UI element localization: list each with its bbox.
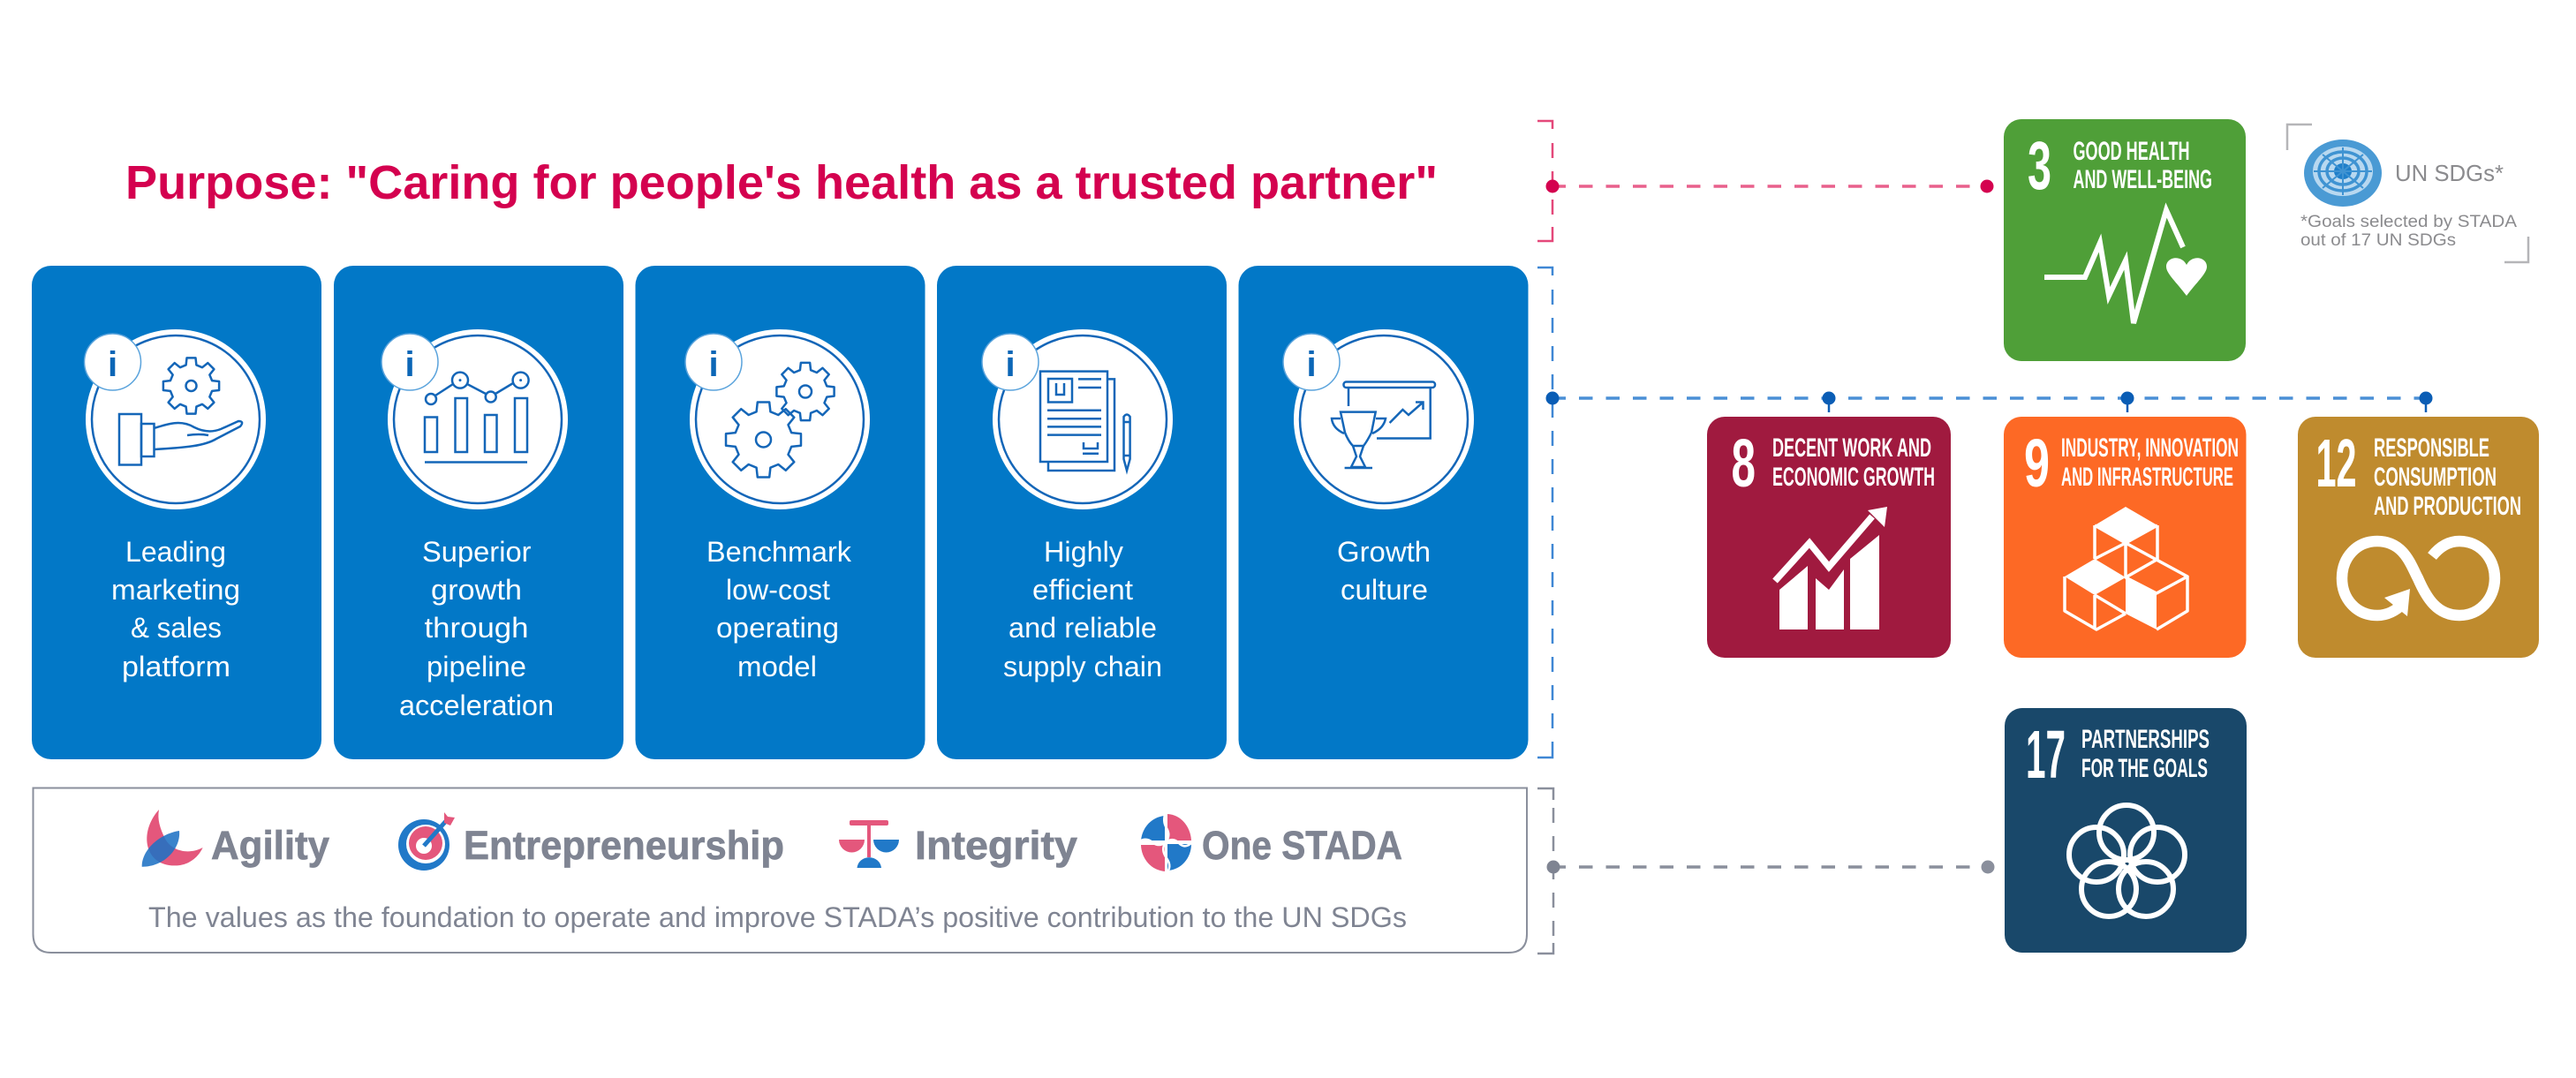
card text: operating <box>716 612 839 644</box>
icon: heartbeat and heart <box>2044 210 2207 323</box>
SDG tile 9: 9 <box>2024 426 2050 501</box>
SDG tile 8: 8 <box>1731 426 1756 501</box>
card text: through <box>424 612 528 644</box>
icon: documents and pen: i <box>1005 345 1016 384</box>
UN SDGs note: UN SDGs* <box>2395 160 2504 186</box>
SDG tile 17 <box>2005 708 2247 953</box>
panel: benchmark low-cost operating model <box>636 266 925 759</box>
SDG tile 3: 3 <box>2028 128 2051 204</box>
panel: leading marketing and sales platform <box>32 266 321 759</box>
card text <box>706 536 852 682</box>
value: agility: Agility <box>211 823 329 868</box>
card text: efficient <box>1032 574 1133 606</box>
SDG tile 12: RESPONSIBLE <box>2374 433 2489 463</box>
icon: rising bars and arrow <box>1775 507 1887 629</box>
value: integrity: Integrity <box>915 823 1077 868</box>
SDG tile 3: AND WELL-BEING <box>2074 165 2212 194</box>
SDG tile 17: FOR THE GOALS <box>2081 754 2208 783</box>
panel: values <box>34 788 1527 953</box>
connector: values to SDG 17 <box>1537 788 1994 954</box>
card text: Highly <box>1044 536 1123 568</box>
card text: & sales <box>131 612 222 644</box>
UN SDGs note: out of 17 UN SDGs <box>2300 231 2456 250</box>
SDG tile 12: 12 <box>2315 426 2356 501</box>
values caption: The values as the foundation to operate and improve STADA’s positive contribution to the UN SDGs <box>148 901 1407 933</box>
icon: interlinked rings <box>2069 805 2185 916</box>
panel: superior growth through pipeline acceleration <box>334 266 623 759</box>
card text: low-cost <box>726 574 830 606</box>
icon: stacked cubes <box>2065 507 2187 629</box>
icon: bar chart with trend <box>381 329 568 509</box>
card text: and reliable <box>1008 612 1157 644</box>
UN SDGs note: *Goals selected by STADA <box>2300 213 2517 231</box>
card text: acceleration <box>399 690 554 721</box>
card text: Growth <box>1337 536 1431 568</box>
SDG tile 9: INDUSTRY, INNOVATION <box>2061 433 2239 463</box>
SDG tile 17: 17 <box>2026 717 2066 793</box>
card text: model <box>737 651 817 682</box>
UN SDGs note <box>2287 124 2528 262</box>
icon: two gears <box>685 329 870 509</box>
icon: entrepreneurship target <box>398 812 455 871</box>
icon: one stada puzzle <box>1139 812 1192 874</box>
panel: highly efficient and reliable supply chain <box>937 266 1227 759</box>
title: Purpose: "Caring for people's health as a trusted partner" <box>125 156 1438 209</box>
icon: infinity loop arrow <box>2342 541 2495 616</box>
SDG tile 3: GOOD HEALTH <box>2074 137 2190 166</box>
SDG tile 12: CONSUMPTION <box>2374 463 2497 492</box>
icon: trophy and presentation board <box>1283 329 1474 509</box>
icon: documents and pen <box>982 329 1173 509</box>
value: entrepreneurship: Entrepreneurship <box>464 823 784 868</box>
card text: supply chain <box>1003 651 1162 682</box>
SDG tile 8 <box>1707 417 1951 658</box>
card text: Leading <box>125 536 226 568</box>
icon: agility <box>142 810 203 867</box>
card text <box>1003 536 1162 682</box>
icon: hand with gear: i <box>108 345 117 384</box>
card text: culture <box>1341 574 1428 606</box>
icon: hand with gear <box>85 329 266 509</box>
card text <box>1337 536 1431 606</box>
SDG tile 8: DECENT WORK AND <box>1772 433 1931 463</box>
icon: two gears: i <box>708 345 719 384</box>
card text: platform <box>122 651 230 682</box>
value: one stada: One STADA <box>1202 823 1402 868</box>
SDG tile 17: PARTNERSHIPS <box>2081 725 2210 754</box>
card text: Superior <box>422 536 532 568</box>
card text <box>399 536 554 721</box>
icon: integrity scales <box>839 820 899 868</box>
card text: growth <box>431 574 522 606</box>
SDG tile 8: ECONOMIC GROWTH <box>1772 463 1935 492</box>
SDG tile 9 <box>2004 417 2247 658</box>
SDG tile 9: AND INFRASTRUCTURE <box>2061 463 2233 492</box>
card text: marketing <box>111 574 240 606</box>
card text <box>111 536 240 682</box>
connector: strategic pillars to SDGs 8, 9 and 12 <box>1537 268 2432 758</box>
icon: UN emblem <box>2304 139 2382 207</box>
card text: Benchmark <box>706 536 852 568</box>
card text: pipeline <box>427 651 526 682</box>
icon: bar chart with trend: i <box>404 345 415 384</box>
SDG tile 3 <box>2004 119 2246 361</box>
panel: growth culture <box>1238 266 1528 759</box>
SDG tile 12 <box>2298 417 2539 658</box>
icon: trophy and presentation board: i <box>1306 345 1317 384</box>
connector: purpose to SDG 3 <box>1537 121 1994 241</box>
